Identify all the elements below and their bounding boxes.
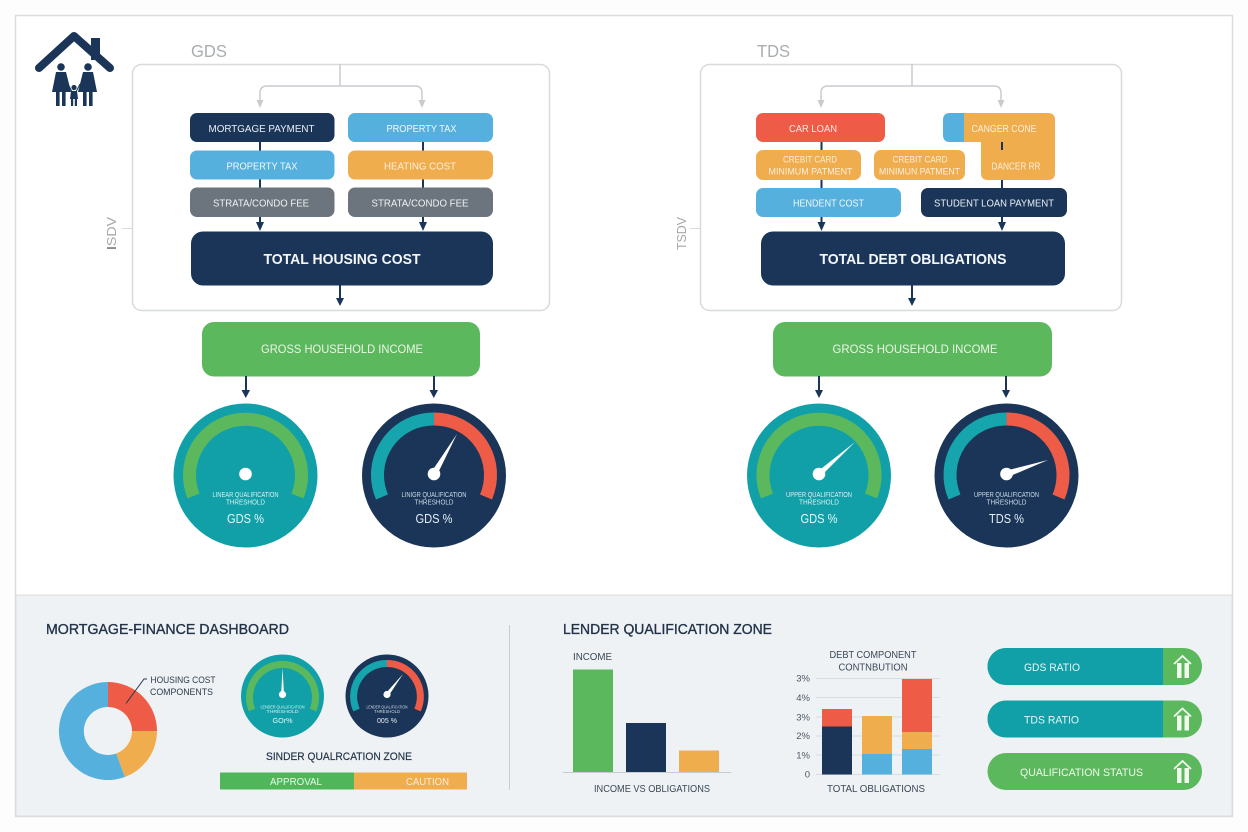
box: heating cost bbox=[348, 150, 493, 180]
box: car loan: CAR LOAN bbox=[789, 123, 837, 135]
panel: dashboard strip bbox=[16, 595, 1232, 816]
bar chart: income vs obligations: INCOME bbox=[573, 652, 612, 663]
stacked bar chart: debt component contribution: 3% bbox=[796, 674, 811, 684]
gauge: TDS navy: TDS % bbox=[989, 512, 1024, 526]
stacked bar chart: debt component contribution bbox=[796, 650, 940, 795]
mini gauge: GDS: THRESHOLD bbox=[266, 709, 299, 714]
gauge: TDS navy bbox=[934, 404, 1078, 548]
box: heating cost: HEATING COST bbox=[384, 160, 457, 172]
gauge: TDS navy: UPPER QUALIFICATION bbox=[974, 492, 1039, 499]
box: hendent cost: HENDENT COST bbox=[793, 198, 864, 210]
box: gross household income (TDS): GROSS HOUSEHOLD INCOME bbox=[832, 342, 998, 356]
gauge: TDS navy: THRESHOLD bbox=[986, 500, 1026, 506]
box: gross household income (GDS) bbox=[202, 322, 480, 376]
stacked bar chart: debt component contribution: DEBT COMPONENT bbox=[830, 650, 916, 661]
box: property tax bbox=[190, 150, 334, 180]
status pill: GDS ratio bbox=[988, 648, 1202, 685]
box: strata fee bbox=[190, 188, 334, 217]
zone bar: approval and caution: APPROVAL bbox=[270, 776, 322, 788]
heading: GDS: GDS bbox=[191, 41, 227, 61]
box: blue and orange cost block: CANGER CONE bbox=[972, 123, 1036, 135]
box: gross household income (GDS): GROSS HOUSEHOLD INCOME bbox=[261, 342, 423, 356]
gauge: GDS teal: LINEAR QUALIFICATION bbox=[212, 492, 278, 499]
status pill: GDS ratio: GDS RATIO bbox=[1024, 662, 1080, 674]
stacked bar chart: debt component contribution: 3% bbox=[796, 712, 811, 724]
status pill: qualification status bbox=[988, 753, 1202, 790]
box: credit card minimum payment: CREBIT CARD bbox=[892, 154, 948, 166]
heading: TDS: TDS bbox=[757, 41, 790, 61]
heading: lender qualification zone: LENDER QUALIFICATION ZONE bbox=[563, 621, 772, 638]
box: blue and orange cost block: DANCER RR bbox=[992, 160, 1041, 172]
mini gauge: GDS: LENDER QUALIFICATION bbox=[260, 704, 304, 710]
gauge: second GDS teal: THRESHOLD bbox=[799, 500, 839, 506]
gauge: GDS teal bbox=[174, 404, 318, 548]
box: credit card minimum payment bbox=[756, 150, 861, 180]
icon: upward house arrow bbox=[1174, 708, 1191, 730]
box: total housing cost bbox=[191, 232, 493, 286]
donut chart: housing cost components bbox=[59, 675, 216, 780]
gauge: GDS navy bbox=[362, 404, 506, 548]
box: mortgage payment: MORTGAGE PAYMENT bbox=[208, 123, 315, 135]
heading: mortgage-finance dashboard: MORTGAGE-FINANCE DASHBOARD bbox=[46, 621, 289, 638]
box: student loan payment bbox=[921, 188, 1067, 217]
box: car loan bbox=[756, 113, 885, 142]
zone bar: approval and caution bbox=[220, 772, 467, 790]
panel: GDS flow bbox=[122, 64, 550, 310]
stacked bar chart: debt component contribution: TOTAL OBLIGATIONS bbox=[827, 784, 925, 795]
mini gauge: TDS: THRESHOLD bbox=[374, 709, 401, 714]
stacked bar chart: debt component contribution: CONTNBUTION bbox=[838, 662, 908, 674]
box: credit card minimum payment bbox=[874, 150, 965, 180]
box: student loan payment: STUDENT LOAN PAYMENT bbox=[934, 198, 1055, 210]
box: strata fee: STRATA/CONDO FEE bbox=[213, 198, 309, 210]
box: strata fee: STRATA/CONDO FEE bbox=[372, 198, 468, 210]
donut chart: housing cost components: COMPONENTS bbox=[150, 687, 213, 698]
box: hendent cost bbox=[756, 188, 901, 217]
bar chart: income vs obligations: INCOME VS OBLIGATIONS bbox=[594, 784, 710, 795]
zone bar: approval and caution: CAUTION bbox=[406, 776, 449, 788]
icon: house and family bbox=[39, 36, 110, 106]
gauge: GDS teal: GDS % bbox=[227, 512, 264, 526]
mini gauge: GDS: GOr% bbox=[272, 716, 293, 725]
donut chart: housing cost components: HOUSING COST bbox=[150, 675, 216, 686]
box: total housing cost: TOTAL HOUSING COST bbox=[264, 251, 420, 268]
bar chart: income vs obligations bbox=[563, 652, 731, 795]
gauge: second GDS teal: GDS % bbox=[800, 512, 838, 526]
box: strata fee bbox=[348, 188, 493, 217]
box: credit card minimum payment: CREBIT CARD bbox=[783, 154, 837, 166]
icon: upward house arrow bbox=[1174, 656, 1191, 678]
box: credit card minimum payment: MINIMUN PATMENT bbox=[879, 166, 960, 178]
box: gross household income (TDS) bbox=[773, 322, 1052, 376]
mini gauge: TDS: 005 % bbox=[377, 716, 397, 725]
status pill: TDS ratio bbox=[988, 700, 1202, 738]
rotated label: TDS side: TSDV bbox=[675, 216, 689, 250]
box: property tax: PROPERTY TAX bbox=[226, 160, 298, 172]
rotated label: GDS side: ISDV bbox=[105, 216, 119, 250]
stacked bar chart: debt component contribution: 2% bbox=[796, 731, 811, 742]
status pill: TDS ratio: TDS RATIO bbox=[1024, 714, 1079, 726]
gauge: GDS teal: THRESHOLD bbox=[226, 500, 265, 506]
mini gauge: TDS bbox=[346, 654, 428, 738]
box: property tax: PROPERTY TAX bbox=[386, 123, 456, 135]
gauge: second GDS teal bbox=[747, 404, 891, 548]
gauge: second GDS teal: UPPER QUALIFICATION bbox=[786, 492, 852, 499]
arrow: debt to income bbox=[908, 285, 916, 306]
box: total debt obligations: TOTAL DEBT OBLIGATIONS bbox=[820, 251, 1006, 268]
gauge: GDS navy: LINIGR QUALIFICATION bbox=[402, 492, 466, 499]
heading: qualification zone: SINDER QUALRCATION ZONE bbox=[266, 751, 412, 763]
gauge: GDS navy: GDS % bbox=[416, 512, 452, 526]
mini gauge: TDS: LENDER QUALIFICATION bbox=[366, 704, 408, 710]
mini gauge: GDS bbox=[241, 654, 324, 738]
arrows: income to gauges bbox=[242, 376, 1010, 398]
gauge: GDS navy: THRESHOLD bbox=[414, 500, 454, 506]
box: mortgage payment bbox=[190, 113, 334, 142]
box: total debt obligations bbox=[761, 232, 1065, 286]
box: property tax bbox=[348, 113, 493, 142]
box: blue and orange cost block bbox=[943, 113, 1055, 180]
box: credit card minimum payment: MINIMUM PATMENT bbox=[768, 166, 853, 178]
arrow: housing cost to income bbox=[336, 285, 344, 306]
stacked bar chart: debt component contribution: 1% bbox=[796, 750, 811, 762]
icon: upward house arrow bbox=[1174, 761, 1191, 783]
panel: TDS flow bbox=[690, 64, 1122, 310]
status pill: qualification status: QUALIFICATION STATUS bbox=[1020, 767, 1143, 779]
stacked bar chart: debt component contribution: 0 bbox=[805, 770, 810, 780]
stacked bar chart: debt component contribution: 4% bbox=[796, 693, 811, 704]
